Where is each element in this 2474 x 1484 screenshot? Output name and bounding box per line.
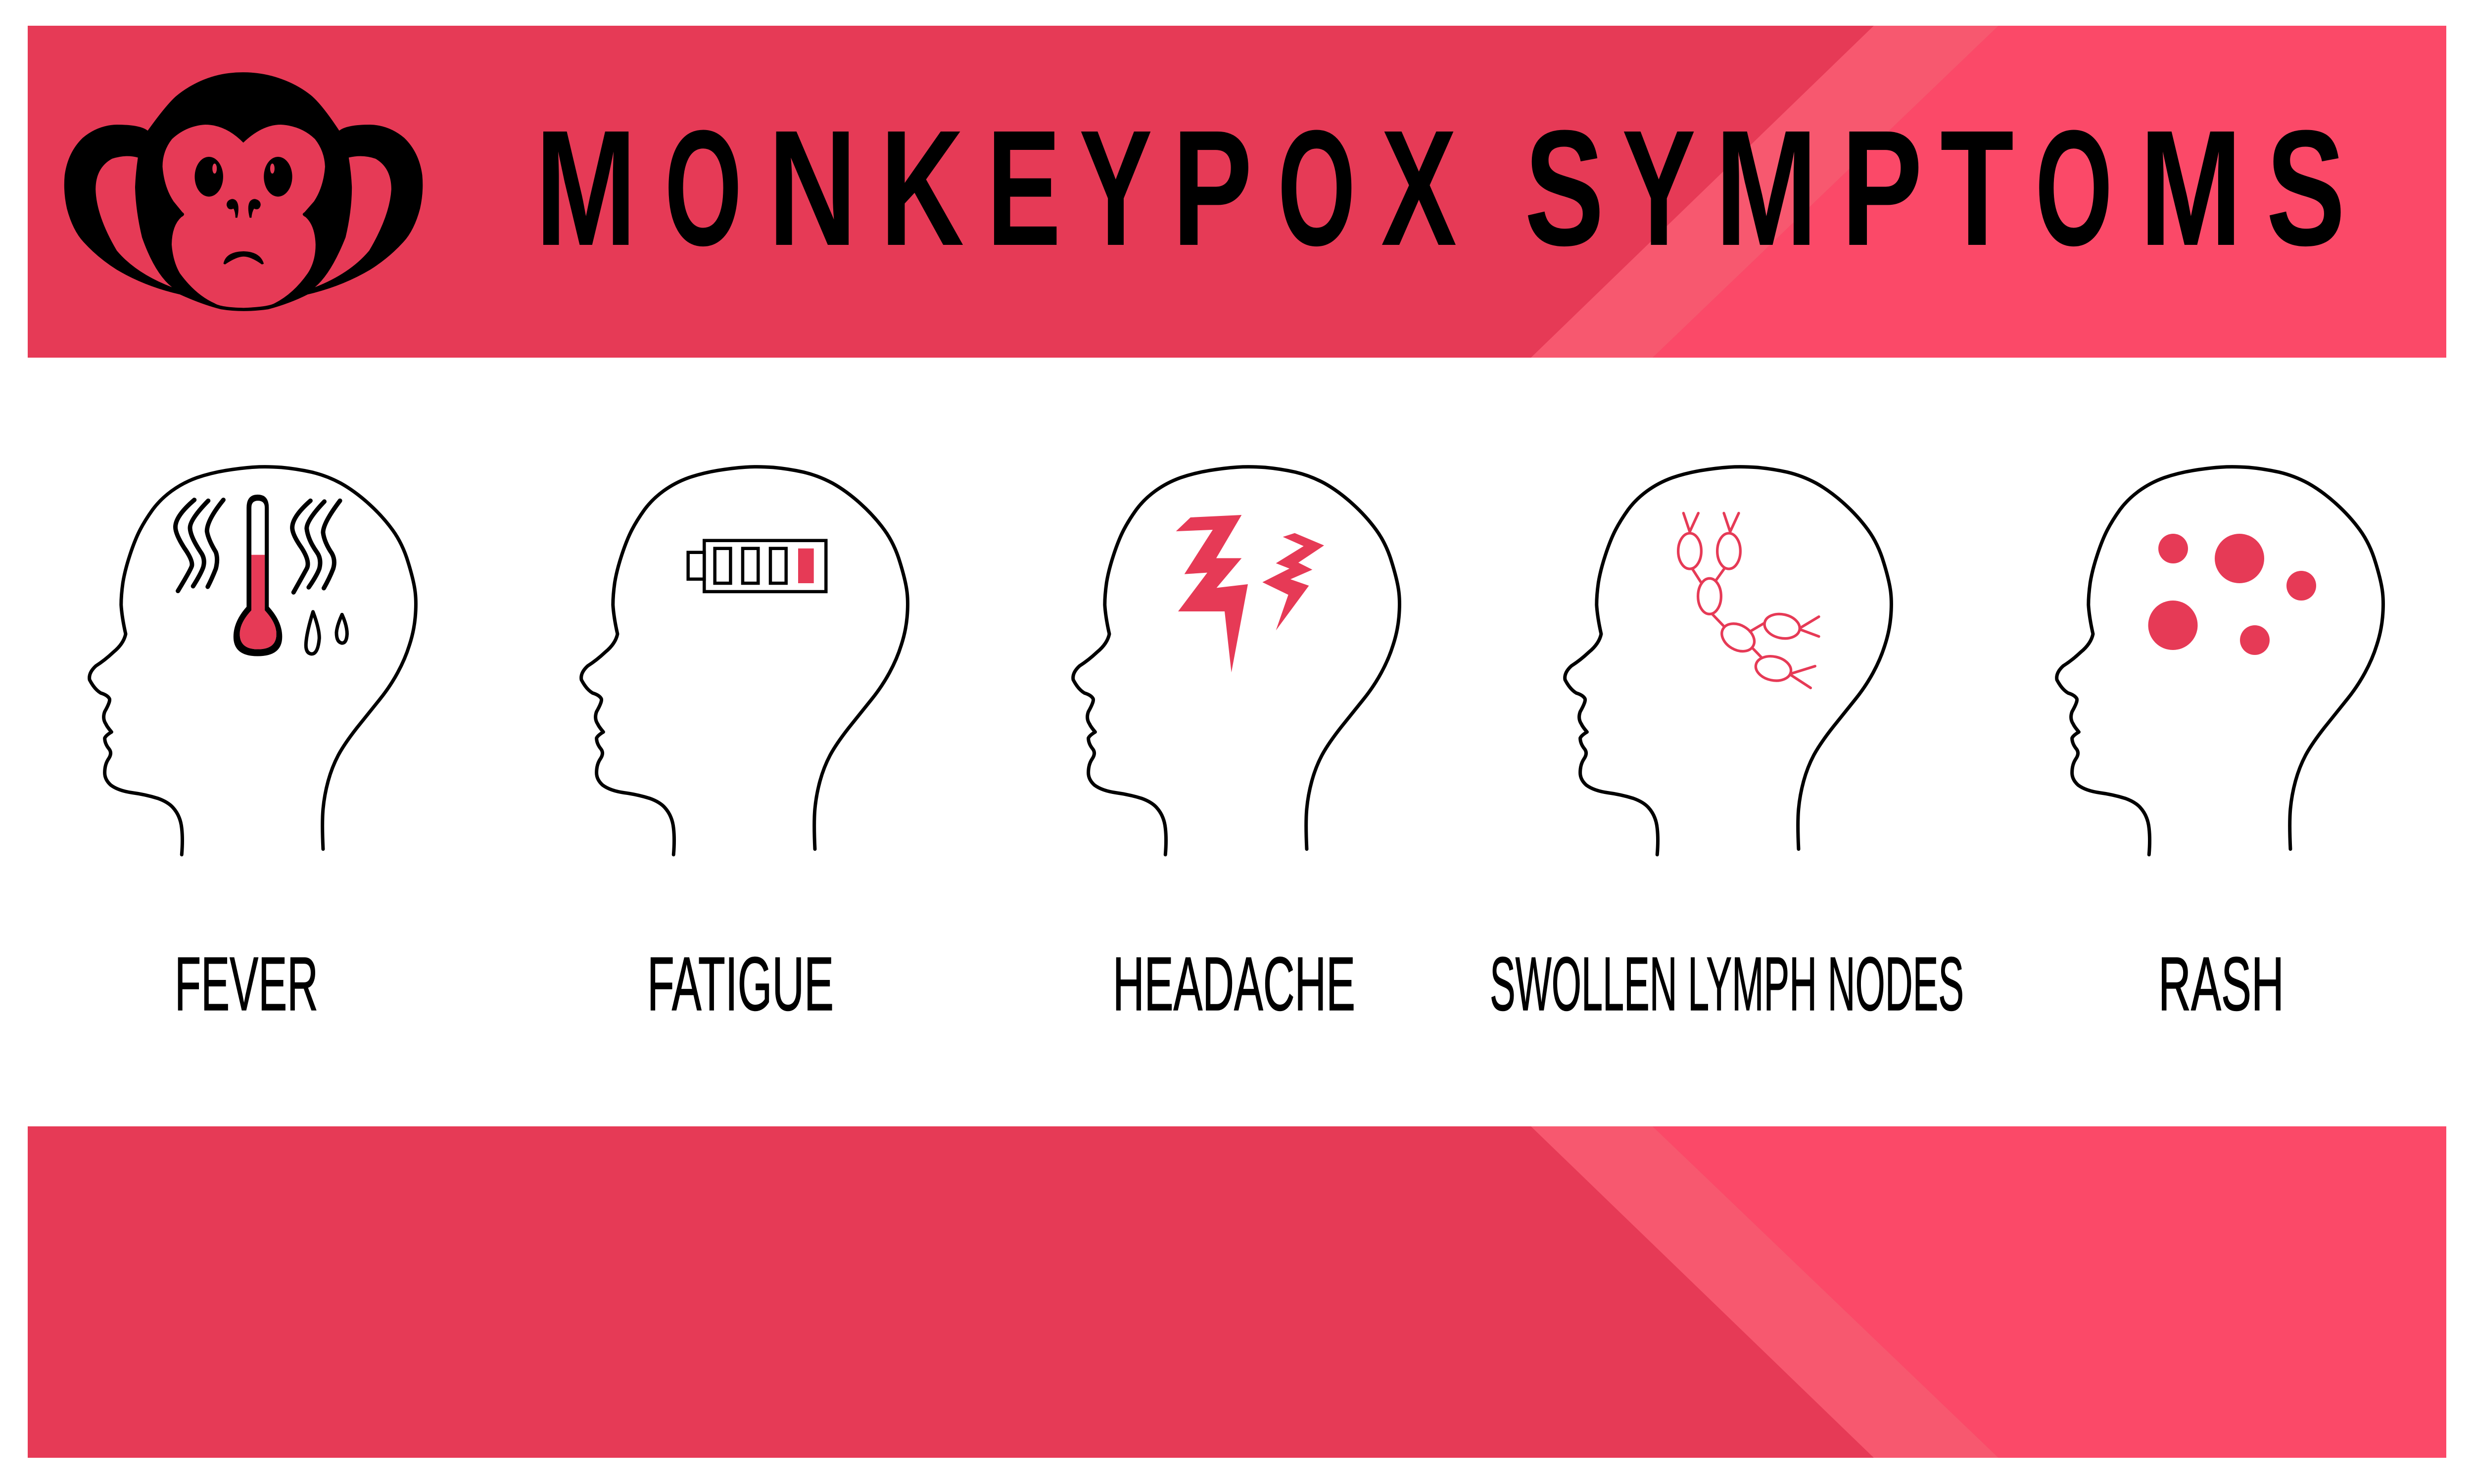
title: E [987, 96, 1061, 280]
panel: rash symptom [2057, 467, 2383, 1026]
head outline: headache [1073, 467, 1399, 855]
title: M [2140, 96, 2242, 280]
title: T [1940, 96, 2014, 280]
title: O [1278, 96, 1356, 280]
icon: lightning bolts [1176, 515, 1324, 672]
icon: sad monkey face [64, 72, 423, 311]
panel: footer banner [28, 1126, 2446, 1458]
title: P [1172, 95, 1252, 280]
title: S [2266, 96, 2345, 280]
title: Y [1622, 96, 1696, 280]
title: K [880, 96, 964, 280]
icon: heat waves and thermometer with sweat drops [175, 495, 347, 656]
panel: header banner [28, 26, 2446, 358]
icon: low battery [688, 541, 826, 592]
panel: swollen lymph nodes symptom [1490, 467, 1964, 1026]
head outline: fever [90, 467, 416, 855]
title: S [1524, 96, 1604, 280]
title: M [1715, 96, 1817, 280]
panel: fever symptom [90, 467, 416, 1026]
title: X [1381, 95, 1457, 280]
head outline: fatigue [581, 467, 907, 855]
title: O [665, 96, 742, 280]
icon: rash spots [2148, 534, 2316, 655]
panel: headache symptom [1073, 467, 1399, 1026]
title: N [768, 96, 857, 280]
panel: fatigue symptom [581, 467, 907, 1026]
head outline: lymph nodes [1565, 467, 1891, 855]
title: P [1841, 96, 1923, 280]
label: rash: RASH [2158, 941, 2284, 1026]
label: fever: FEVER [175, 941, 318, 1026]
title: M [535, 96, 637, 280]
icon: lymph node chain [1678, 513, 1819, 688]
head outline: rash [2057, 467, 2383, 855]
label: fatigue: FATIGUE [647, 941, 834, 1026]
title: Y [1079, 96, 1152, 280]
label: headache: HEADACHE [1113, 941, 1355, 1026]
title [535, 95, 2345, 280]
label: swollen lymph nodes: SWOLLEN LYMPH NODES [1490, 941, 1964, 1026]
title: O [2035, 96, 2113, 280]
